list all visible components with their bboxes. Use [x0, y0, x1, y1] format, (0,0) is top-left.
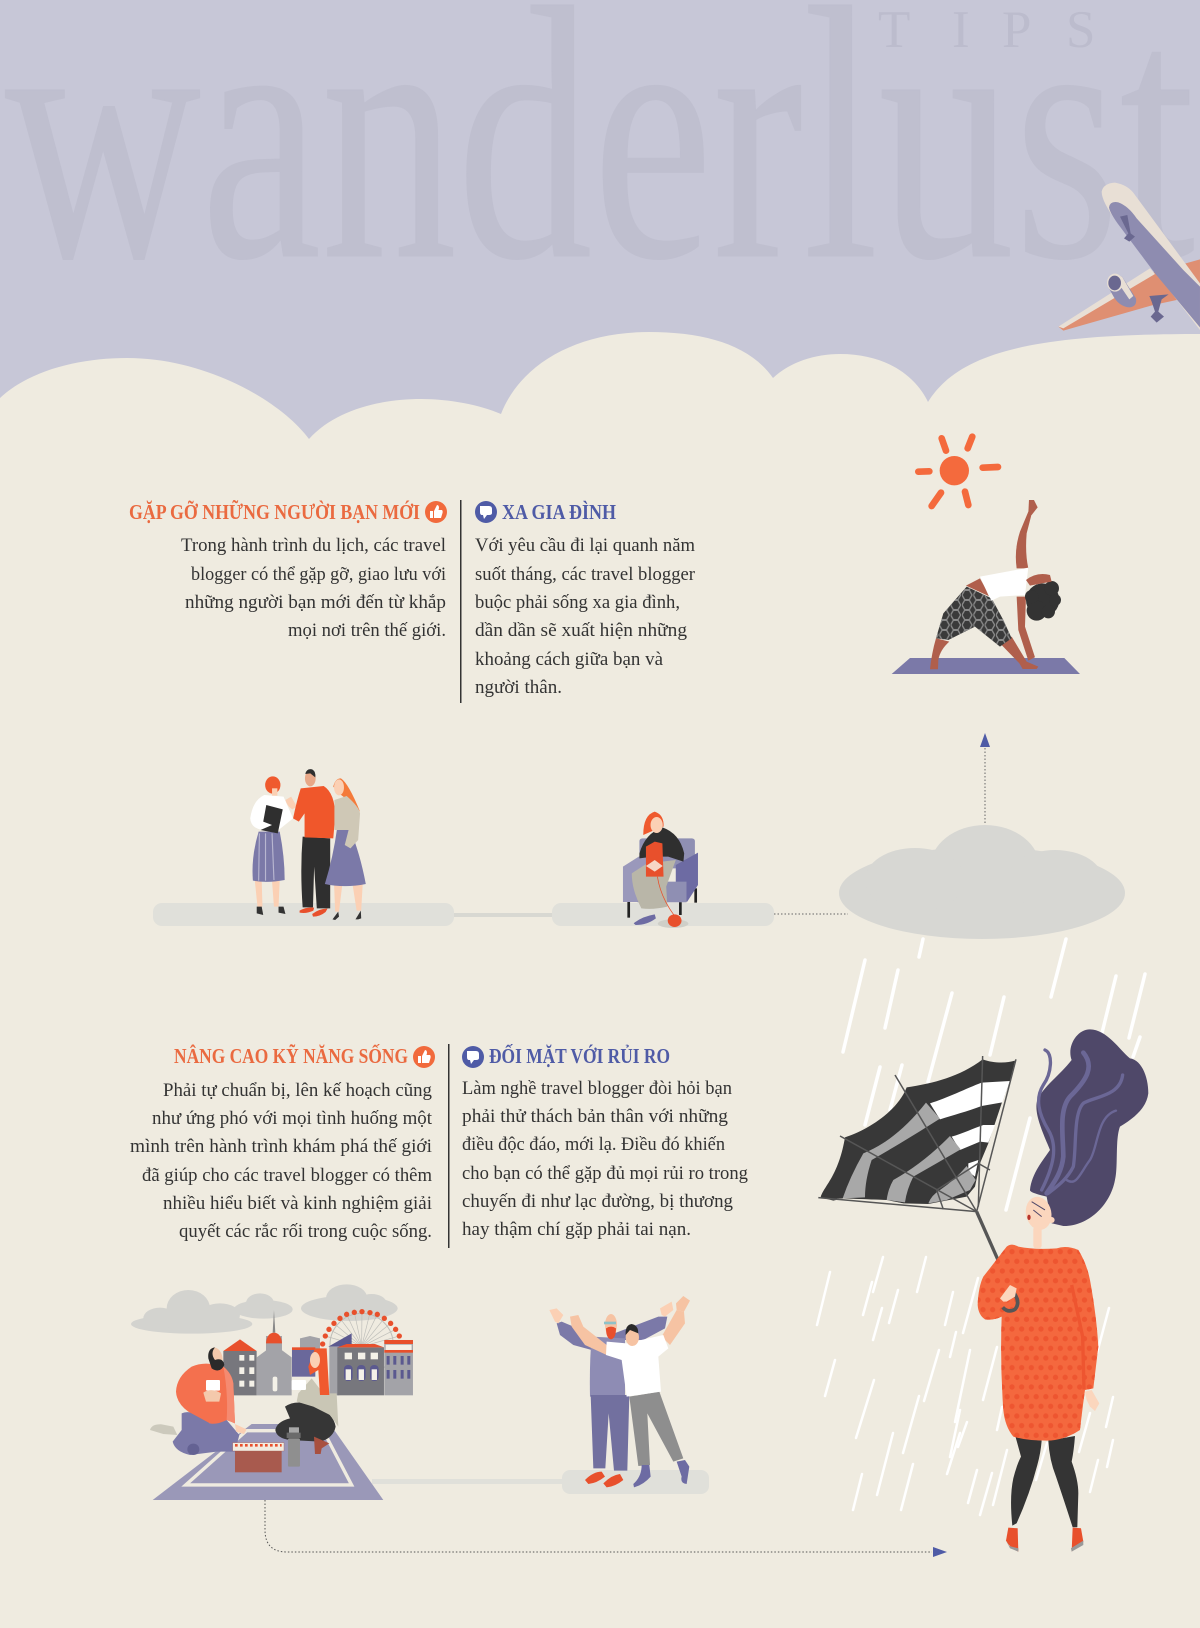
icon: thumbs up [413, 1046, 435, 1068]
icon: thumbs down [462, 1046, 484, 1068]
bearded man [150, 1346, 247, 1455]
body text: away from family: Với yêu cầu đi lại quanh năm [475, 535, 695, 556]
body text: away from family: khoảng cách giữa bạn và [475, 649, 664, 670]
body text: away from family [475, 535, 696, 698]
watermark word tips: TIPS [878, 1, 1095, 59]
body text: life skills: mình trên hành trình khám phá thế giới [130, 1136, 432, 1157]
body text: life skills: Phải tự chuẩn bị, lên kế hoạch cũng [163, 1080, 432, 1101]
heading: new friends: GẶP GỠ NHỮNG NGƯỜI BẠN MỚI [129, 500, 420, 524]
yoga mat [892, 658, 1080, 674]
body text: new friends: blogger có thể gặp gỡ, giao lưu với [191, 564, 446, 585]
clouds [131, 1284, 398, 1334]
illustration: knitting woman in armchair [552, 812, 774, 928]
connector bar [454, 913, 553, 917]
body text: life skills: đã giúp cho các travel blogger có thêm [142, 1165, 432, 1186]
body text: life skills: như ứng phó với mọi tình huống một [152, 1108, 433, 1129]
illustration: two friends cheering [549, 1296, 709, 1494]
illustration: picnic with city [131, 1284, 413, 1500]
body text: new friends: Trong hành trình du lịch, các travel [181, 535, 446, 556]
arrow up [980, 733, 990, 823]
body text: new friends: những người bạn mới đến từ khắp [185, 592, 446, 613]
friends [549, 1296, 690, 1487]
body text: away from family: buộc phải sống xa gia đình, [475, 592, 680, 613]
illustration: three friends on platform [153, 769, 553, 926]
dotted connector to grey cloud [774, 913, 848, 915]
body text: life skills: nhiều hiểu biết và kinh nghiệm giải [163, 1193, 432, 1214]
heading: facing risks: ĐỐI MẶT VỚI RỦI RO [489, 1044, 670, 1068]
legs and boots [1006, 1390, 1099, 1552]
icon: airplane [1058, 183, 1200, 331]
illustration: sun and yoga woman [892, 437, 1080, 674]
heading: away from family: XA GIA ĐÌNH [502, 500, 616, 524]
thermos [287, 1427, 301, 1467]
heading: life skills: NÂNG CAO KỸ NĂNG SỐNG [174, 1044, 408, 1068]
icon: thumbs down [475, 501, 497, 523]
platform left [153, 903, 454, 926]
body text: away from family: người thân. [475, 677, 562, 698]
body text: facing risks [462, 1078, 748, 1240]
body text: facing risks: điều độc đáo, mới lạ. Điều đó khiến [462, 1134, 725, 1155]
cream cloud ground [0, 332, 1200, 1628]
sky background [0, 0, 1200, 460]
red-haired woman [275, 1348, 338, 1454]
body text: facing risks: hay thậm chí gặp phải tai nạn. [462, 1219, 691, 1240]
rain streaks lower [817, 1257, 1113, 1515]
picnic rug [153, 1424, 383, 1500]
grey cloud [839, 825, 1125, 939]
dotted path with arrow to umbrella woman [265, 1500, 947, 1557]
text block: life skills [130, 1044, 435, 1242]
dress [978, 1245, 1098, 1441]
text block: facing risks [462, 1044, 748, 1240]
text block: meeting new friends [129, 500, 447, 641]
body text: life skills [130, 1080, 433, 1242]
yoga woman [930, 500, 1061, 669]
icon: thumbs up [425, 501, 447, 523]
three friends [250, 769, 366, 920]
icon: sun [918, 437, 998, 506]
platform middle [552, 903, 774, 926]
body text: facing risks: chuyến đi như lạc đường, bị thương [462, 1191, 733, 1212]
rain streaks upper [843, 939, 1145, 1210]
knitting woman [623, 812, 698, 928]
body text: life skills: quyết các rắc rối trong cuộc sống. [179, 1221, 432, 1242]
body text: away from family: suốt tháng, các travel blogger [475, 564, 696, 585]
text block: away from family [475, 500, 696, 698]
connector bar lower [372, 1479, 564, 1484]
ferris wheel [320, 1309, 402, 1377]
body text: away from family: dần dần sẽ xuất hiện những [475, 620, 688, 641]
platform lower [562, 1470, 709, 1494]
body text: facing risks: Làm nghề travel blogger đòi hỏi bạn [462, 1078, 732, 1099]
picnic box [233, 1443, 284, 1472]
illustration: woman with broken umbrella [818, 1029, 1148, 1552]
head, neck and flowing hair [1023, 1029, 1148, 1248]
body text: facing risks: phải thử thách bản thân với những [462, 1106, 729, 1127]
city buildings [223, 1310, 413, 1395]
broken umbrella [818, 1056, 1016, 1283]
body text: facing risks: cho bạn có thể gặp đủ mọi rủi ro trong [462, 1163, 748, 1184]
body text: new friends [181, 535, 446, 641]
body text: new friends: mọi nơi trên thế giới. [288, 620, 446, 641]
